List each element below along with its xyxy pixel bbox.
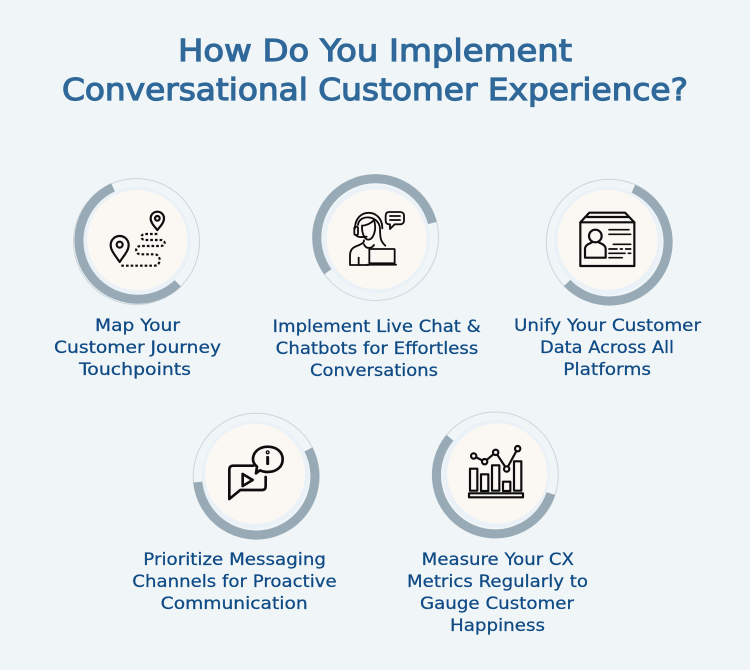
panel: unify customer data xyxy=(514,179,701,379)
label: measure your cx metrics regularly: Gauge Customer xyxy=(420,594,574,613)
label: unify your customer data across all platforms: Data Across All xyxy=(540,338,674,357)
progress ring 4 xyxy=(193,413,319,539)
icon: map pins with dashed route xyxy=(111,212,165,266)
label: map your customer journey touchpoints xyxy=(54,316,221,379)
label: unify your customer data across all platforms: Unify Your Customer xyxy=(514,316,701,335)
label: implement live chat and chatbots xyxy=(273,317,481,380)
panel: prioritize messaging channels xyxy=(132,413,337,613)
label: measure your cx metrics regularly: Measure Your CX xyxy=(422,550,574,569)
progress ring 1 xyxy=(74,179,200,305)
label: implement live chat and chatbots: Conversations xyxy=(310,361,438,380)
label: map your customer journey touchpoints: Customer Journey xyxy=(54,338,221,357)
panel: map customer journey xyxy=(54,179,221,379)
label: prioritize messaging channels for proactive communication xyxy=(132,550,337,613)
label: prioritize messaging channels for proactive communication: Prioritize Messaging xyxy=(143,550,326,569)
label: implement live chat and chatbots: Chatbots for Effortless xyxy=(276,339,478,358)
label: prioritize messaging channels for proactive communication: Channels for Proactive xyxy=(132,572,337,591)
progress ring 5 xyxy=(432,412,558,538)
title: How Do You Implement xyxy=(178,34,572,69)
panel: measure cx metrics xyxy=(407,412,588,635)
label: implement live chat and chatbots: Implement Live Chat & xyxy=(273,317,481,336)
icon: bar and line chart xyxy=(469,446,523,497)
label: measure your cx metrics regularly xyxy=(407,550,588,635)
label: prioritize messaging channels for proactive communication: Communication xyxy=(161,594,308,613)
label: map your customer journey touchpoints: Map Your xyxy=(95,316,180,335)
progress ring 3 xyxy=(546,179,672,305)
progress ring 2 xyxy=(312,174,438,300)
title xyxy=(62,34,688,108)
label: measure your cx metrics regularly: Metrics Regularly to xyxy=(407,572,588,591)
icon: video chat and info bubbles xyxy=(229,447,283,499)
label: measure your cx metrics regularly: Happiness xyxy=(450,616,545,635)
icon: support agent with headset, laptop and speech bubble xyxy=(350,212,404,265)
label: unify your customer data across all platforms: Platforms xyxy=(563,360,651,379)
title: Conversational Customer Experience? xyxy=(62,73,688,108)
icon: customer profile card xyxy=(580,213,634,266)
label: map your customer journey touchpoints: Touchpoints xyxy=(78,360,191,379)
label: unify your customer data across all platforms xyxy=(514,316,701,379)
panel: live chat and chatbots xyxy=(273,174,481,380)
